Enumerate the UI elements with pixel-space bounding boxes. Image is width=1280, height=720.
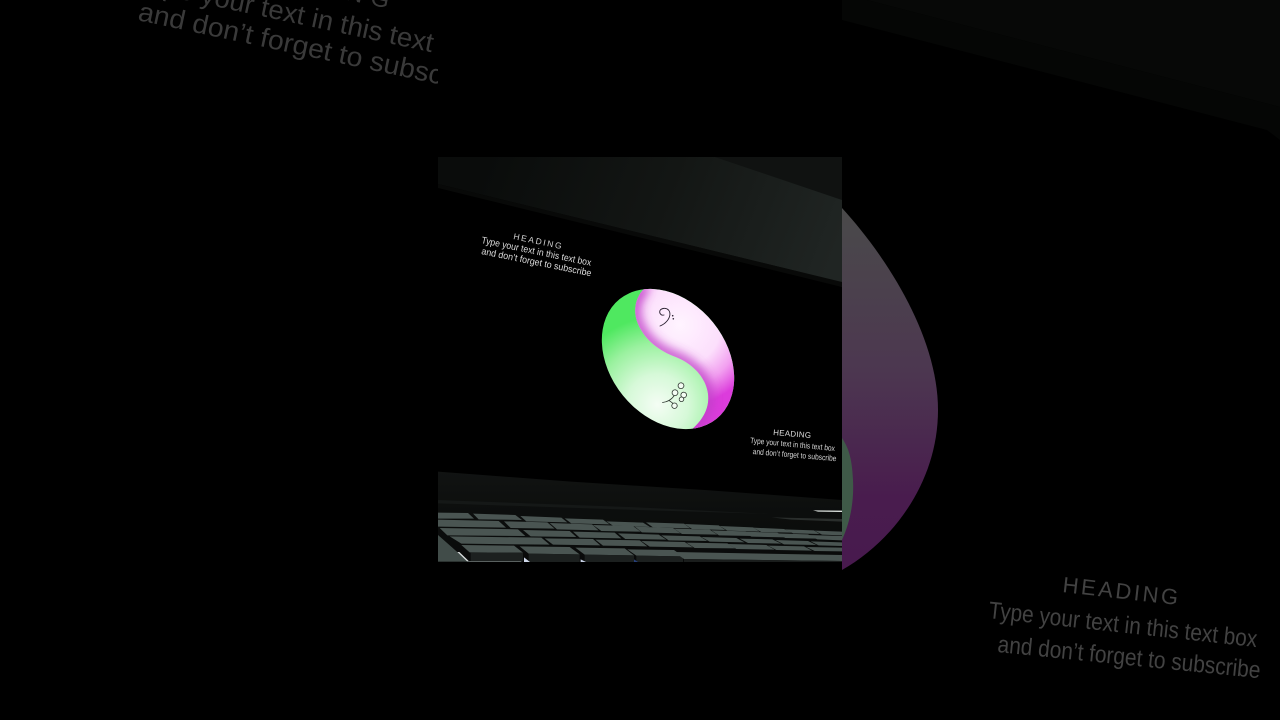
caption body: Type your text in this text box <box>480 235 592 269</box>
key row 2 <box>438 520 842 540</box>
key rows <box>438 513 842 563</box>
panel lower edge <box>438 562 842 563</box>
key row 1 <box>438 513 842 535</box>
top-left caption <box>482 233 592 276</box>
lower-left palm rest <box>438 535 468 562</box>
bottom-right caption <box>750 430 836 462</box>
central laptop photo panel <box>438 157 842 564</box>
key row 3 <box>440 528 842 546</box>
laptop deck and keyboard <box>438 472 842 563</box>
caption heading: HEADING <box>513 231 563 251</box>
icon: bass clef <box>660 308 674 326</box>
faint blurred bezel top right <box>842 0 1280 140</box>
green half <box>602 288 734 430</box>
icon: blossom branch <box>662 383 686 408</box>
key backlight slivers <box>457 552 638 562</box>
caption body: and don’t forget to subscribe <box>752 447 837 463</box>
caption heading: HEADING <box>773 428 811 440</box>
yin-yang egg <box>602 288 734 430</box>
blurred enlarged text: bottom right: HEADING <box>1061 572 1180 610</box>
key row 5 with front faces <box>461 545 842 563</box>
deck highlights <box>438 500 842 522</box>
blurred enlarged yin-yang: right edge <box>842 208 938 570</box>
blurred enlarged text: bottom right <box>987 572 1262 684</box>
pink half <box>635 288 734 429</box>
caption body: Type your text in this text box <box>750 436 835 453</box>
caption body <box>750 438 836 462</box>
laptop upper bezel <box>438 157 842 287</box>
caption body: and don’t forget to subscribe <box>480 246 592 279</box>
key row 4 <box>450 536 842 551</box>
keyboard deck <box>438 472 842 563</box>
